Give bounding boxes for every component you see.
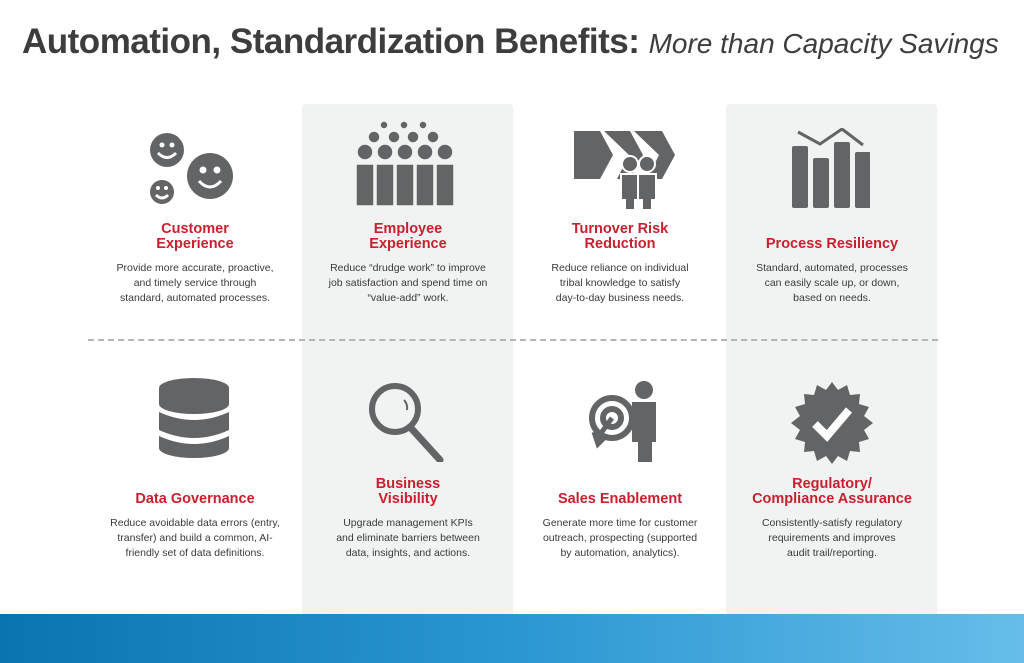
text: regulatory compliance: Compliance Assurance (752, 491, 912, 507)
text: data governance: Reduce avoidable data errors (entry, (110, 517, 280, 529)
icon: bar chart with trend line (792, 128, 870, 208)
text: business visibility: Visibility (378, 491, 438, 507)
text: business visibility: Upgrade management KPIs (343, 517, 473, 529)
text: customer experience: Customer (161, 221, 229, 237)
text: employee experience: Reduce “drudge work” to improve (330, 262, 486, 274)
text: employee experience: Experience (369, 236, 447, 252)
text: sales enablement: by automation, analytics). (560, 547, 680, 559)
text: business visibility: Business (376, 476, 440, 492)
text: employee experience: Employee (374, 221, 442, 237)
text: regulatory compliance (752, 476, 912, 559)
text: sales enablement: Sales Enablement (558, 491, 682, 507)
text: process resiliency: can easily scale up, or down, (765, 277, 899, 289)
text: sales enablement: outreach, prospecting (supported (543, 532, 697, 544)
icon: checkmark seal (791, 382, 873, 464)
text: data governance (110, 491, 280, 559)
blue footer band (0, 614, 1024, 663)
text: regulatory compliance: audit trail/reporting. (787, 547, 877, 559)
text: turnover risk: tribal knowledge to satisfy (560, 277, 680, 289)
text: data governance: Data Governance (135, 491, 255, 507)
text: customer experience: Provide more accurate, proactive, (116, 262, 274, 274)
icon: chevrons with people (574, 131, 675, 209)
text: process resiliency (756, 236, 908, 304)
text: business visibility: and eliminate barriers between (336, 532, 480, 544)
icon: magnifying glass (369, 383, 444, 462)
icon: smiley faces (150, 133, 233, 204)
text: customer experience: standard, automated processes. (120, 292, 270, 304)
panel: shaded column 2 (302, 104, 513, 616)
text: business visibility: data, insights, and actions. (346, 547, 470, 559)
text: sales enablement: Generate more time for customer (543, 517, 697, 529)
text: business visibility (336, 476, 480, 559)
text: sales enablement (543, 491, 698, 559)
text: process resiliency: based on needs. (793, 292, 871, 304)
text: regulatory compliance: Consistently-satisfy regulatory (762, 517, 902, 529)
text: customer experience: Experience (156, 236, 234, 252)
text: turnover risk: Reduce reliance on individual (551, 262, 689, 274)
icon: database (159, 378, 229, 458)
text: employee experience (328, 221, 487, 304)
title: Automation, Standardization Benefits: More than Capacity Savings (22, 22, 999, 61)
icon: crowd of employees (356, 122, 454, 206)
text: regulatory compliance: requirements and improves (768, 532, 896, 544)
icon: target with person (589, 381, 656, 462)
text: customer experience (116, 221, 274, 304)
text: turnover risk: Turnover Risk (572, 221, 668, 237)
text: turnover risk: day-to-day business needs. (556, 292, 684, 304)
text: process resiliency: Standard, automated, processes (756, 262, 908, 274)
text: employee experience: “value-add” work. (367, 292, 449, 304)
divider dashed (88, 339, 938, 341)
text: data governance: friendly set of data definitions. (126, 547, 264, 559)
panel: shaded column 4 (726, 104, 937, 616)
text: turnover risk (551, 221, 689, 304)
text: data governance: transfer) and build a common, AI- (117, 532, 273, 544)
text: process resiliency: Process Resiliency (766, 236, 898, 252)
text: turnover risk: Reduction (585, 236, 655, 252)
text: employee experience: job satisfaction and spend time on (329, 277, 487, 289)
text: customer experience: and timely service through (134, 277, 256, 289)
text: regulatory compliance: Regulatory/ (792, 476, 872, 492)
